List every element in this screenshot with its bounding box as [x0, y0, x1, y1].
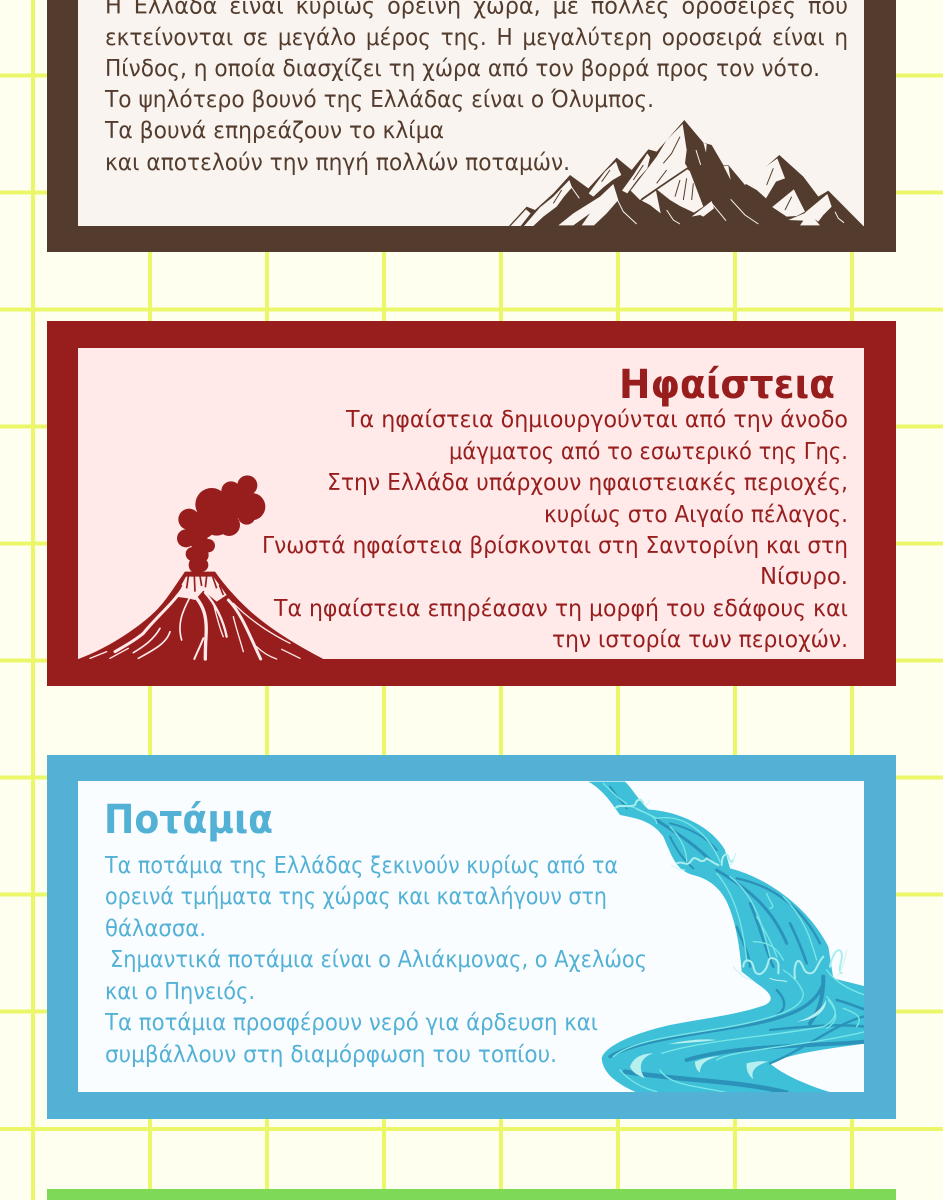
- text block: volcanoes description: Στην Ελλάδα υπάρχουν ηφαιστειακές περιοχές,: [327, 470, 848, 496]
- panel: mountains: [47, 0, 896, 252]
- text block: rivers description: και ο Πηνειός.: [105, 979, 255, 1005]
- panel: rivers: [47, 755, 896, 1119]
- icon: mountain range: [508, 120, 864, 227]
- text block: volcanoes description: Τα ηφαίστεια δημιουργούνται από την άνοδο: [345, 407, 848, 433]
- text block: volcanoes description: μάγματος από το εσωτερικό της Γης.: [449, 439, 848, 465]
- panel: volcanoes: [47, 321, 896, 686]
- text block: volcanoes description: Νίσυρο.: [760, 564, 848, 590]
- text block: mountains description: και αποτελούν την πηγή πολλών ποταμών.: [105, 150, 570, 176]
- panel: next section (cropped): [47, 1189, 896, 1200]
- text block: mountains description: [104, 0, 848, 176]
- text block: mountains description: Τα βουνά επηρεάζουν το κλίμα: [104, 118, 444, 144]
- text block: rivers description: Σημαντικά ποτάμια είναι ο Αλιάκμονας, ο Αχελώος: [110, 947, 647, 973]
- heading: volcanoes: Ηφαίστεια: [619, 362, 835, 408]
- text block: rivers description: ορεινά τμήματα της χώρας και καταλήγουν στη: [105, 884, 607, 910]
- text block: rivers description: συμβάλλουν στη διαμόρφωση του τοπίου.: [105, 1042, 557, 1068]
- text block: mountains description: εκτείνονται σε μεγάλο μέρος της. Η μεγαλύτερη οροσειρά είναι η: [105, 25, 848, 51]
- icon: flowing river: [588, 782, 867, 1094]
- icon: erupting volcano: [78, 475, 323, 659]
- text block: rivers description: Τα ποτάμια της Ελλάδας ξεκινούν κυρίως από τα: [104, 853, 618, 879]
- text block: mountains description: Το ψηλότερο βουνό της Ελλάδας είναι ο Όλυμπος.: [104, 87, 654, 113]
- text block: rivers description: [104, 853, 647, 1068]
- heading: rivers: Ποτάμια: [104, 797, 273, 843]
- text block: volcanoes description: Γνωστά ηφαίστεια βρίσκονται στη Σαντορίνη και στη: [262, 533, 848, 559]
- text block: volcanoes description: την ιστορία των περιοχών.: [552, 627, 848, 653]
- text block: mountains description: Πίνδος, η οποία διασχίζει τη χώρα από τον βορρά προς τον νότο.: [105, 56, 820, 82]
- text block: rivers description: θάλασσα.: [105, 916, 206, 942]
- text block: volcanoes description: κυρίως στο Αιγαίο πέλαγος.: [544, 502, 848, 528]
- text block: volcanoes description: Τα ηφαίστεια επηρέασαν τη μορφή του εδάφους και: [273, 596, 848, 622]
- text block: rivers description: Τα ποτάμια προσφέρουν νερό για άρδευση και: [104, 1010, 598, 1036]
- text block: volcanoes description: [262, 407, 848, 653]
